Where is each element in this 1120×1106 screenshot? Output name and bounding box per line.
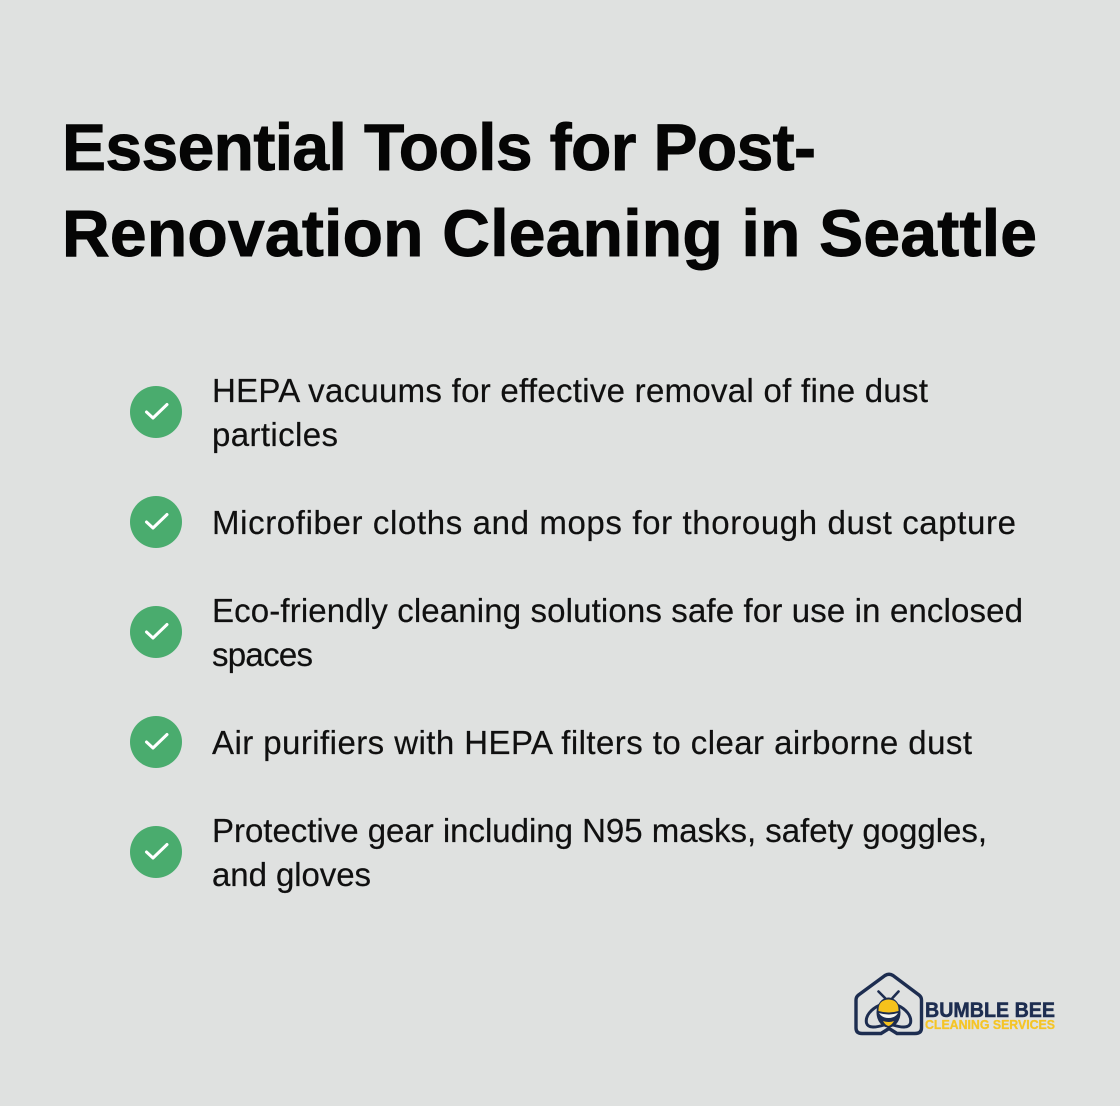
text: eco-friendly solutions — [212, 592, 1023, 673]
text: eco-friendly solutions: Eco-friendly cleaning solutions safe for use in enclosed — [212, 592, 1023, 629]
text: HEPA vacuums: particles — [212, 416, 338, 453]
text: eco-friendly solutions: spaces — [212, 636, 313, 673]
title: Renovation Cleaning in Seattle — [62, 196, 1037, 270]
title: Essential Tools for Post- — [62, 110, 816, 184]
item: air purifiers — [130, 716, 972, 768]
text: air purifiers: Air purifiers with HEPA filters to clear airborne dust — [212, 724, 972, 761]
icon: check mark — [130, 606, 182, 658]
icon: check mark — [130, 386, 182, 438]
text: protective gear — [212, 812, 987, 893]
icon: house with bee — [856, 974, 922, 1034]
icon: check mark — [130, 826, 182, 878]
item: eco-friendly solutions — [130, 592, 1023, 673]
logo tagline: CLEANING SERVICES — [925, 1018, 1055, 1032]
text: protective gear: Protective gear including N95 masks, safety goggles, — [212, 812, 987, 849]
title — [62, 110, 1037, 270]
icon: check mark — [130, 716, 182, 768]
text: microfiber cloths: Microfiber cloths and mops for thorough dust capture — [212, 504, 1016, 541]
item: protective gear — [130, 812, 987, 893]
icon: check mark — [130, 496, 182, 548]
text: protective gear: and gloves — [212, 856, 371, 893]
text: HEPA vacuums: HEPA vacuums for effective removal of fine dust — [212, 372, 928, 409]
text: HEPA vacuums — [212, 372, 928, 453]
checklist — [130, 372, 1023, 893]
item: HEPA vacuums — [130, 372, 928, 453]
logo: Bumble Bee Cleaning Services — [856, 974, 1055, 1034]
item: microfiber cloths — [130, 496, 1016, 548]
logo wordmark: BUMBLE BEE — [925, 999, 1055, 1022]
